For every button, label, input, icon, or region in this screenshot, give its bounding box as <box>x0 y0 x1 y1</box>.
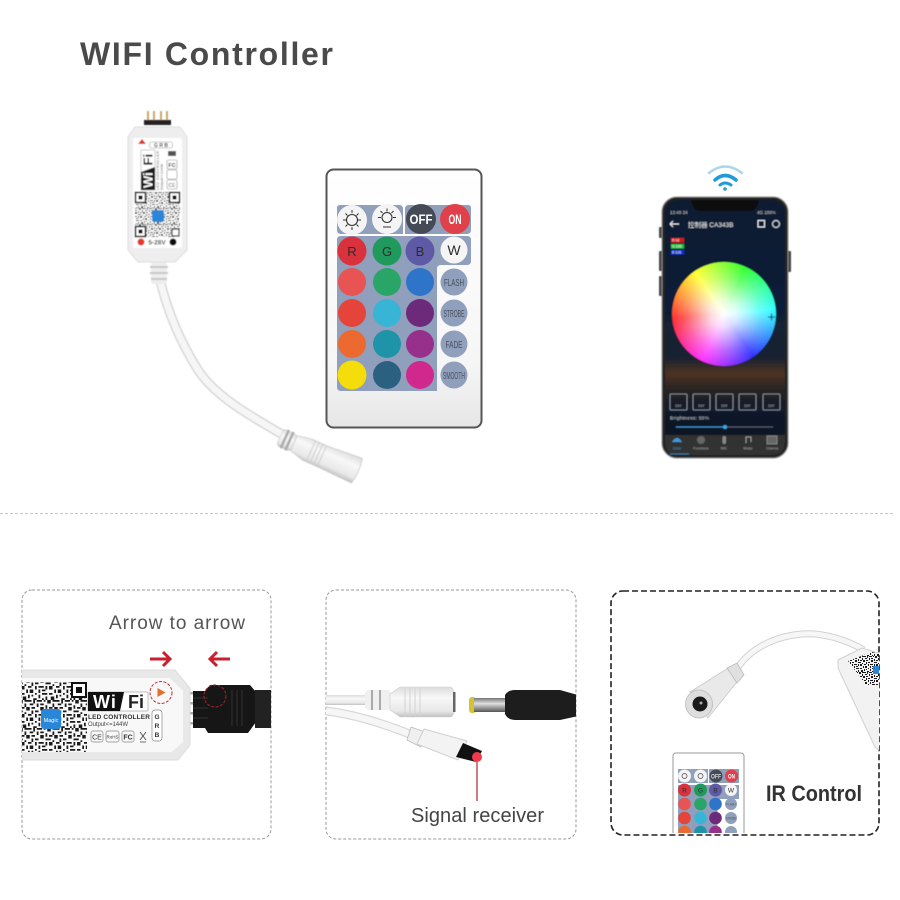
mini mode buttons: FLASH <box>726 802 736 806</box>
GRB pill <box>152 710 162 741</box>
certification marks: FC <box>123 734 133 742</box>
photo: controller and plug: Output<=144W <box>88 722 128 728</box>
upper white cable <box>326 695 368 705</box>
mini colour buttons <box>678 798 722 838</box>
tab bar: Functions <box>693 446 709 450</box>
RGBW row: G <box>382 244 392 259</box>
app header <box>670 220 780 229</box>
RGBW row: W <box>447 242 461 258</box>
tab bar: Music <box>743 446 753 450</box>
status bar and notch <box>670 200 776 215</box>
mini top row <box>678 770 738 782</box>
heading: Arrow to arrow <box>109 613 245 634</box>
GRB pill: R <box>155 723 160 730</box>
label area <box>22 678 183 752</box>
lower white cable <box>326 711 412 735</box>
strain relief <box>150 262 168 284</box>
QR code <box>848 652 882 685</box>
WiFi controller product with cable <box>128 111 364 484</box>
brightness slider: Brightness: 50% <box>670 416 710 422</box>
label text: LED CONTROLLER <box>88 714 150 721</box>
LED controller text: LED CONTROLLER <box>156 151 160 190</box>
mode buttons: STROBE <box>444 309 465 320</box>
button panels <box>337 205 471 391</box>
icon: right arrow <box>150 652 170 666</box>
mini RGBW row <box>678 784 737 796</box>
GRB pill <box>150 142 172 149</box>
male plug body <box>505 690 578 720</box>
DC female connector <box>275 424 364 484</box>
mini button panels <box>678 769 739 860</box>
QR code <box>135 192 180 237</box>
mode buttons: FADE <box>446 340 463 351</box>
controller body <box>22 670 190 760</box>
play marker <box>150 682 172 704</box>
DIY buttons <box>670 394 780 410</box>
panel: signal receiver <box>326 590 578 839</box>
certification marks: RoHS <box>106 734 119 740</box>
mini remote <box>672 752 744 833</box>
collar <box>365 690 391 710</box>
RGB value tags: R 92 <box>672 238 679 242</box>
black cable <box>255 690 271 728</box>
DIY buttons: DIY <box>698 404 705 408</box>
mini top row: OFF <box>711 774 721 780</box>
phone side buttons <box>659 227 791 296</box>
mini mode buttons <box>725 798 737 838</box>
mini mode buttons: STROBE <box>726 816 736 820</box>
RGBW row: R <box>347 244 357 259</box>
IR remote control <box>326 170 482 428</box>
tab bar <box>665 435 785 455</box>
cable <box>735 634 864 672</box>
label <box>133 138 182 248</box>
tab bar: Color <box>673 446 682 450</box>
DIY buttons: DIY <box>744 404 751 408</box>
panel border <box>22 590 271 839</box>
mode buttons: SMOOTH <box>443 371 465 382</box>
controller body <box>128 127 187 262</box>
cable <box>160 280 285 436</box>
tab bar: Cinema <box>766 446 778 450</box>
RGB value tags: G 196 <box>672 244 682 248</box>
connector mark circle <box>204 685 226 707</box>
title: WIFI Controller <box>80 36 333 72</box>
black connector <box>193 685 256 733</box>
top row buttons: OFF <box>410 211 433 227</box>
red pointer line <box>476 762 478 801</box>
phone frame <box>662 197 788 458</box>
mini RGBW row: B <box>713 788 718 794</box>
LED controller text <box>156 151 164 190</box>
wheel crosshair <box>768 314 775 320</box>
icon: wifi signal <box>709 166 742 191</box>
tab bar: MIC <box>721 446 728 450</box>
GRB pill: G R B <box>154 143 168 149</box>
mini top row: ON <box>728 774 735 780</box>
phone screen <box>665 200 785 455</box>
WiFi badge: Wi <box>140 172 156 188</box>
brightness slider <box>670 416 773 429</box>
WiFi badge: Fi <box>128 692 144 712</box>
female connector <box>390 687 455 717</box>
RGB value tags: B 126 <box>672 250 681 254</box>
WiFi badge: Fi <box>140 154 156 166</box>
panel: IR control <box>610 590 880 836</box>
WiFi badge <box>88 692 148 712</box>
connector front <box>686 690 712 718</box>
blue QR logo <box>873 666 879 674</box>
connector ribs <box>405 688 420 716</box>
connector pin <box>700 702 702 704</box>
WiFi badge: Wi <box>93 692 117 712</box>
remote body <box>326 170 482 428</box>
certification marks <box>167 151 177 189</box>
controller corner <box>838 648 879 751</box>
app header: 控制器 CA343B <box>688 220 734 229</box>
WiFi badge <box>140 150 156 190</box>
mini RGBW row: G <box>698 788 703 794</box>
certification marks: CE <box>92 734 102 742</box>
icon: left arrow <box>210 652 230 666</box>
section divider <box>0 512 895 514</box>
RGBW row: B <box>416 244 424 259</box>
GRB pill: B <box>155 732 160 739</box>
connector hole <box>692 696 708 712</box>
photo: cables and plugs <box>326 687 578 801</box>
mini remote body <box>673 753 744 871</box>
connector opening <box>453 692 456 712</box>
power markers <box>138 238 176 246</box>
power markers: 5-28V <box>148 240 166 246</box>
photo: controller cable <box>686 634 885 755</box>
RGB value tags <box>671 238 684 254</box>
certification marks: CE <box>169 183 176 189</box>
certification marks <box>91 731 146 742</box>
red triangle <box>138 139 146 144</box>
panel border <box>611 591 879 835</box>
DIY buttons: DIY <box>768 404 775 408</box>
RGBW row <box>338 236 468 266</box>
panel: arrow to arrow <box>22 590 273 839</box>
connector collar <box>727 663 744 683</box>
caption: Signal receiver <box>411 805 544 827</box>
smartphone app <box>659 197 791 458</box>
mini RGBW row: R <box>682 788 687 794</box>
pins <box>144 111 171 125</box>
top row buttons: ON <box>448 211 462 227</box>
status bar and notch: 4G 100% <box>757 210 776 215</box>
DIY buttons: DIY <box>721 404 728 408</box>
GRB pill: G <box>154 714 160 721</box>
DIY buttons: DIY <box>675 404 682 408</box>
colour wheel <box>672 262 776 366</box>
connector barrel <box>690 667 737 718</box>
pins <box>190 692 193 724</box>
receiver head <box>407 727 482 762</box>
photo: controller and plug <box>22 670 273 760</box>
QR code: Magic <box>44 718 59 724</box>
LED controller text: Output<=144W <box>160 163 164 190</box>
male plug tip <box>469 697 476 713</box>
status bar and notch: 13:40 34 <box>670 210 688 215</box>
mode buttons <box>440 268 468 388</box>
connector pin slots <box>193 698 208 718</box>
mode buttons: FLASH <box>444 278 464 289</box>
caption: IR Control <box>766 781 862 806</box>
certification marks: FC <box>168 163 176 169</box>
top row buttons <box>337 204 470 235</box>
QR code <box>22 682 87 752</box>
mini RGBW row: W <box>728 788 735 794</box>
panel border <box>326 590 576 839</box>
male plug barrel <box>474 698 506 712</box>
colour buttons <box>338 268 434 390</box>
